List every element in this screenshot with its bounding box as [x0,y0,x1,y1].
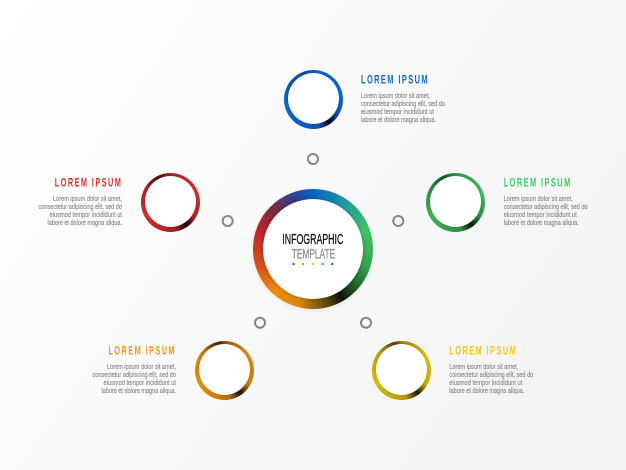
orange text: LOREM IPSUM [108,345,176,358]
central title text: TEMPLATE [292,246,335,262]
blue text: Lorem ipsum dolor sit amet, [361,91,430,100]
red text: LOREM IPSUM [55,177,122,190]
panel: left red [38,173,200,232]
panel: bottom-right yellow [372,341,534,400]
red text: labore et dolore magna aliqua. [48,218,122,227]
yellow text: eiusmod tempor incididunt ut [449,378,523,387]
green text: consectetur adipiscing elit, sed do [504,202,588,211]
blue text [361,74,445,124]
multicolor gradient ring [253,189,373,309]
green text: labore et dolore magna aliqua. [504,218,579,227]
central title text: INFOGRAPHIC [282,232,343,248]
yellow ring [372,341,431,400]
yellow text: labore et dolore magna aliqua. [449,386,524,395]
orange ring [194,341,254,400]
green text: eiusmod tempor incididunt ut [504,210,577,219]
red text [38,177,123,227]
orange text: eiusmod tempor incididunt ut [104,378,177,387]
green text: LOREM IPSUM [504,177,572,190]
central title text [282,232,344,266]
blue ring [284,70,342,128]
yellow text: Lorem ipsum dolor sit amet, [449,362,518,371]
central circle [252,189,374,311]
panel: right green [426,173,588,232]
orange text [92,345,177,395]
red text: consectetur adipiscing elit, sed do [38,202,122,211]
blue text: LOREM IPSUM [361,74,429,86]
blue text: consectetur adipiscing elit, sed do [361,99,445,108]
green text [504,177,588,227]
orange text: Lorem ipsum dolor sit amet, [107,362,176,371]
red text: Lorem ipsum dolor sit amet, [53,194,122,203]
orange text: labore et dolore magna aliqua. [102,386,176,395]
green ring [426,172,485,232]
green text: Lorem ipsum dolor sit amet, [504,194,573,203]
red ring [141,172,200,232]
yellow text [449,345,534,395]
red text: eiusmod tempor incididunt ut [50,210,123,219]
panel: bottom-left orange [92,341,254,400]
blue text: eiusmod tempor incididunt ut [361,107,435,116]
yellow text: consectetur adipiscing elit, sed do [449,370,533,379]
panel: top blue [284,70,445,129]
orange text: consectetur adipiscing elit, sed do [92,370,176,379]
blue text: labore et dolore magna aliqua. [361,115,436,124]
yellow text: LOREM IPSUM [449,345,517,358]
white inner disc [263,199,363,299]
